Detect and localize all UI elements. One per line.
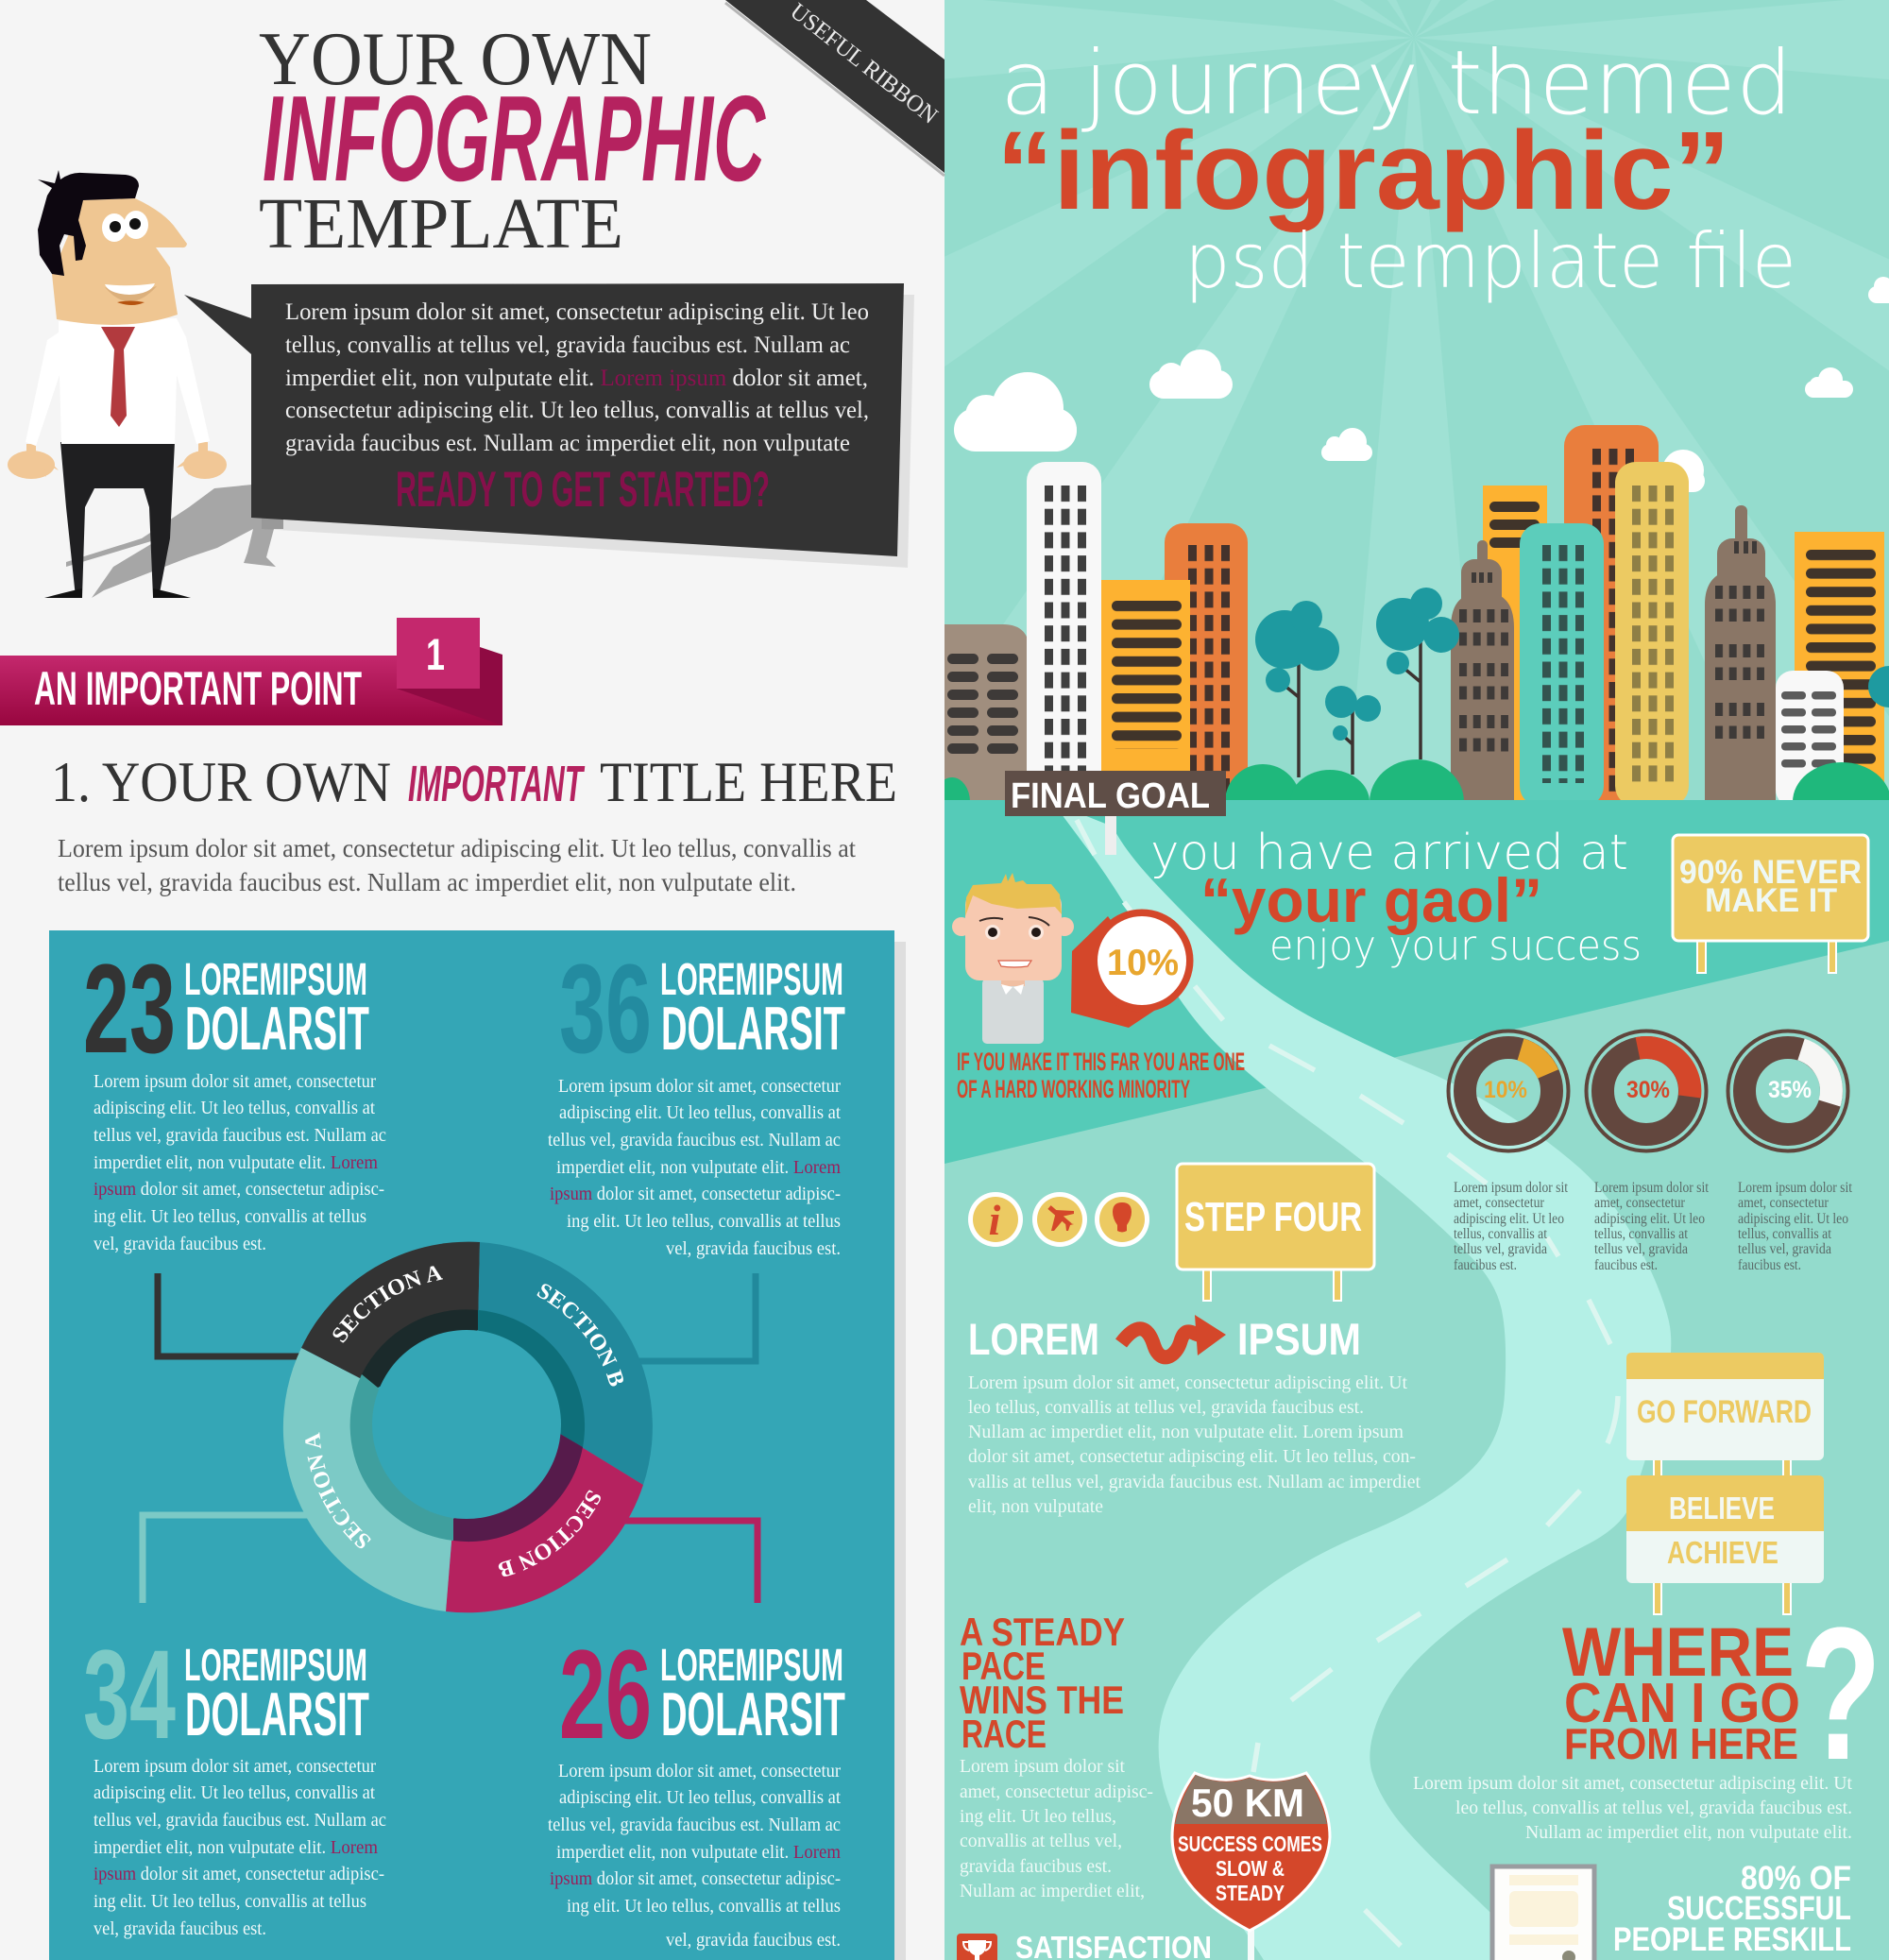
road bbox=[1053, 803, 1671, 1960]
bubble text: Lorem ipsum dolor sit amet, consectetur adipiscing elit. Ut leo bbox=[285, 299, 869, 325]
building: brown left bbox=[944, 624, 1030, 807]
bubble text: tellus, convallis at tellus vel, gravida faucibus est. Nullam ac bbox=[285, 332, 850, 358]
intro paragraph bbox=[58, 834, 856, 896]
shirt bbox=[26, 318, 210, 446]
small text columns under donuts: amet, consectetur bbox=[1594, 1195, 1686, 1211]
stat: 34 bbox=[83, 1625, 386, 1939]
banner: an important point: AN IMPORTANT POINT bbox=[34, 662, 362, 715]
small text columns under donuts: adipiscing elit. Ut leo bbox=[1454, 1211, 1564, 1227]
paragraph: tellus vel, gravida faucibus est. Nullam ac bbox=[548, 1815, 841, 1835]
paragraph: steady pace: ing elit. Ut leo tellus, bbox=[960, 1807, 1116, 1827]
building: yellow left bbox=[1101, 580, 1190, 807]
journey title: psd template file bbox=[1184, 217, 1796, 305]
corner ribbon bbox=[725, 0, 944, 176]
paragraph: tellus vel, gravida faucibus est. Nullam ac bbox=[548, 1131, 841, 1150]
banner: an important point: 1 bbox=[426, 629, 445, 679]
trees bbox=[1255, 588, 1889, 777]
paragraph: ipsum dolor sit amet, consectetur adipisc- bbox=[94, 1865, 384, 1884]
heading: a steady pace: WINS THE bbox=[960, 1678, 1124, 1722]
section title bbox=[51, 751, 897, 813]
paragraph: where: Lorem ipsum dolor sit amet, consectetur adipiscing elit. Ut bbox=[1413, 1774, 1853, 1794]
icon: info bbox=[968, 1192, 1023, 1247]
building: white small bbox=[1776, 671, 1844, 807]
paragraph: where: Nullam ac imperdiet elit, non vulputate elit. bbox=[1525, 1823, 1852, 1843]
building: white tower bbox=[1027, 462, 1101, 807]
hands bbox=[8, 442, 227, 479]
small text columns under donuts: tellus vel, gravida bbox=[1594, 1241, 1688, 1257]
bubble text: gravida faucibus est. Nullam ac imperdiet elit, non vulputate bbox=[285, 431, 850, 456]
badge: 10 percent pin: 10% bbox=[1107, 943, 1179, 983]
heading: where can I go from here: FROM HERE bbox=[1564, 1719, 1798, 1768]
paragraph: tellus vel, gravida faucibus est. Nullam ac bbox=[94, 1811, 386, 1831]
icon: trophy bbox=[957, 1934, 997, 1960]
donut: 35 percent: 35% bbox=[1768, 1077, 1812, 1103]
segment labels bbox=[305, 1266, 623, 1577]
heading: a steady pace: A STEADY bbox=[960, 1610, 1125, 1654]
stat: 26: 26 bbox=[559, 1625, 652, 1765]
callout: hard working minority bbox=[957, 1048, 1245, 1103]
sign: believe achieve bbox=[1626, 1475, 1824, 1614]
icon: info: i bbox=[989, 1196, 1001, 1244]
shield: 50 km bbox=[1172, 1773, 1330, 1960]
paragraph: tellus vel, gravida faucibus est. Nullam ac bbox=[94, 1126, 386, 1146]
journey title: “infographic” bbox=[996, 109, 1730, 233]
paragraph: lorem ipsum: vallis at tellus vel, gravida faucibus est. Nullam ac imperdiet bbox=[968, 1473, 1421, 1492]
paragraph: ing elit. Ut leo tellus, convallis at tellus bbox=[94, 1892, 366, 1912]
paragraph: ing elit. Ut leo tellus, convallis at tellus bbox=[567, 1897, 841, 1917]
segment labels: SECTION A bbox=[305, 1432, 371, 1549]
stat: 23 bbox=[83, 939, 386, 1254]
heading: where can I go from here: WHERE bbox=[1562, 1614, 1794, 1691]
building: teal bbox=[1520, 523, 1604, 807]
icon: bulb bbox=[1095, 1192, 1149, 1247]
banner: an important point bbox=[0, 618, 502, 725]
paragraph: where: leo tellus, convallis at tellus vel, gravida faucibus est. bbox=[1455, 1798, 1852, 1818]
bubble text bbox=[285, 299, 869, 456]
stat: 26 bbox=[548, 1625, 845, 1951]
bubble text: consectetur adipiscing elit. Ut leo tellus, convallis at tellus vel, bbox=[285, 398, 869, 423]
building: gray tower right bbox=[1705, 505, 1776, 807]
paragraph: steady pace: amet, consectetur adipisc- bbox=[960, 1782, 1153, 1802]
sign: believe achieve: ACHIEVE bbox=[1667, 1535, 1778, 1570]
heading: where can I go from here bbox=[1562, 1589, 1881, 1799]
mouth bbox=[105, 283, 157, 305]
paragraph: adipiscing elit. Ut leo tellus, convallis at bbox=[559, 1103, 842, 1123]
paragraph: imperdiet elit, non vulputate elit. Lorem bbox=[556, 1158, 841, 1178]
intro paragraph: tellus vel, gravida faucibus est. Nullam ac imperdiet elit, non vulputate elit. bbox=[58, 868, 796, 896]
callout: 80 percent reskill bbox=[1613, 1860, 1851, 1958]
heading: a steady pace bbox=[960, 1610, 1125, 1756]
heading: lorem arrow ipsum: LOREM bbox=[968, 1314, 1099, 1364]
stat: 34: DOLARSIT bbox=[185, 1679, 369, 1748]
heading: you have arrived: you have arrived at bbox=[1150, 825, 1628, 881]
sign: step four: STEP FOUR bbox=[1184, 1194, 1362, 1240]
paragraph: vel, gravida faucibus est. bbox=[666, 1931, 841, 1951]
small text columns under donuts: amet, consectetur bbox=[1454, 1195, 1545, 1211]
tie bbox=[101, 327, 135, 427]
heading: you have arrived: enjoy your success bbox=[1269, 922, 1642, 970]
title bbox=[259, 18, 766, 264]
final goal sign bbox=[1005, 771, 1226, 855]
paragraph: lorem ipsum bbox=[968, 1373, 1421, 1517]
paragraph: steady pace bbox=[960, 1757, 1153, 1901]
paragraph: adipiscing elit. Ut leo tellus, convallis at bbox=[94, 1099, 376, 1118]
building: yellow tall bbox=[1615, 462, 1689, 807]
callout: hard working minority: OF A HARD WORKING MINORITY bbox=[957, 1075, 1190, 1103]
segment labels: SECTION B bbox=[499, 1490, 601, 1577]
city skyline bbox=[934, 425, 1889, 844]
shield: 50 km: 50 KM bbox=[1191, 1781, 1304, 1825]
segment labels: SECTION A bbox=[332, 1266, 443, 1343]
paragraph: adipiscing elit. Ut leo tellus, convallis at bbox=[559, 1788, 842, 1808]
small text columns under donuts: tellus, convallis at bbox=[1738, 1226, 1832, 1242]
shield: 50 km: SUCCESS COMES bbox=[1178, 1832, 1322, 1856]
paragraph: Lorem ipsum dolor sit amet, consectetur bbox=[558, 1762, 841, 1781]
section title: 1. YOUR OWN bbox=[51, 751, 391, 813]
title: TEMPLATE bbox=[259, 184, 623, 264]
stat: 23: LOREMIPSUM bbox=[184, 955, 367, 1005]
head bbox=[52, 198, 187, 325]
building: orange right bbox=[1795, 532, 1884, 807]
sign: step four bbox=[1177, 1164, 1374, 1301]
stat: 26: DOLARSIT bbox=[661, 1679, 845, 1748]
donut: 35 percent bbox=[1728, 1031, 1847, 1150]
small text columns under donuts bbox=[1454, 1180, 1853, 1273]
stat: 23: 23 bbox=[83, 939, 176, 1080]
title: YOUR OWN bbox=[259, 18, 652, 101]
connector lines bbox=[143, 1273, 757, 1603]
shield: 50 km: STEADY bbox=[1216, 1881, 1285, 1905]
paragraph bbox=[94, 1072, 386, 1254]
journey title bbox=[996, 32, 1796, 305]
trousers bbox=[60, 442, 175, 598]
paragraph: steady pace: gravida faucibus est. bbox=[960, 1857, 1112, 1877]
small text columns under donuts: faucibus est. bbox=[1454, 1257, 1517, 1273]
paragraph: lorem ipsum: elit, non vulputate bbox=[968, 1497, 1103, 1517]
paragraph: lorem ipsum: Lorem ipsum dolor sit amet, consectetur adipiscing elit. Ut bbox=[968, 1373, 1408, 1393]
ground: lower area bbox=[944, 907, 1889, 1960]
sign: 90% never make it: 90% NEVER bbox=[1679, 854, 1862, 891]
clouds bbox=[954, 277, 1889, 492]
paragraph: where bbox=[1413, 1774, 1853, 1843]
stat: 34: 34 bbox=[83, 1625, 176, 1765]
paragraph: ing elit. Ut leo tellus, convallis at tellus bbox=[94, 1207, 366, 1227]
building: gray tower left bbox=[1451, 540, 1514, 807]
callout: 80 percent reskill: 80% OF bbox=[1741, 1860, 1851, 1897]
eyes bbox=[102, 211, 148, 242]
paragraph: Lorem ipsum dolor sit amet, consectetur bbox=[558, 1077, 841, 1097]
shoes bbox=[44, 588, 191, 598]
paragraph: steady pace: Nullam ac imperdiet elit, bbox=[960, 1882, 1145, 1901]
paragraph: imperdiet elit, non vulputate elit. Lorem bbox=[94, 1153, 378, 1173]
paragraph: steady pace: Lorem ipsum dolor sit bbox=[960, 1757, 1126, 1777]
small text columns under donuts: tellus, convallis at bbox=[1594, 1226, 1689, 1242]
call to action: READY TO GET STARTED? bbox=[396, 462, 770, 518]
small text columns under donuts: adipiscing elit. Ut leo bbox=[1594, 1211, 1705, 1227]
paragraph bbox=[94, 1757, 386, 1939]
heading: lorem arrow ipsum: IPSUM bbox=[1237, 1314, 1361, 1364]
small text columns under donuts: faucibus est. bbox=[1594, 1257, 1658, 1273]
building: yellow back bbox=[1483, 486, 1547, 807]
paragraph: lorem ipsum: Nullam ac imperdiet elit, non vulputate elit. Lorem ipsum bbox=[968, 1423, 1404, 1442]
paragraph: Lorem ipsum dolor sit amet, consectetur bbox=[94, 1757, 376, 1777]
stat: 36: LOREMIPSUM bbox=[660, 955, 843, 1005]
hair bbox=[38, 170, 139, 276]
donut: 30 percent: 30% bbox=[1626, 1077, 1670, 1103]
heading: a steady pace: PACE bbox=[962, 1644, 1046, 1688]
character shadow bbox=[66, 485, 283, 598]
heading: a steady pace: RACE bbox=[962, 1712, 1047, 1756]
paragraph bbox=[548, 1077, 842, 1259]
sign: go forward: GO FORWARD bbox=[1637, 1394, 1812, 1430]
donut: 10 percent: 10% bbox=[1484, 1077, 1527, 1103]
stat: 36: 36 bbox=[559, 939, 652, 1080]
paragraph: vel, gravida faucibus est. bbox=[666, 1239, 841, 1259]
paragraph: ipsum dolor sit amet, consectetur adipisc- bbox=[550, 1185, 841, 1204]
building: orange left bbox=[1165, 523, 1248, 807]
building: orange tall bbox=[1564, 425, 1659, 807]
paragraph bbox=[548, 1762, 842, 1951]
heading: you have arrived bbox=[1150, 825, 1642, 970]
section title: TITLE HERE bbox=[600, 751, 897, 813]
bushes bbox=[934, 759, 1889, 844]
paragraph: ipsum dolor sit amet, consectetur adipisc- bbox=[94, 1180, 384, 1200]
donut: 30 percent bbox=[1587, 1031, 1706, 1150]
final goal sign: FINAL GOAL bbox=[1011, 776, 1210, 816]
heading: where can I go from here: CAN I GO bbox=[1564, 1672, 1800, 1734]
small text columns under donuts: amet, consectetur bbox=[1738, 1195, 1829, 1211]
small text columns under donuts: tellus vel, gravida bbox=[1738, 1241, 1831, 1257]
small text columns under donuts: Lorem ipsum dolor sit bbox=[1594, 1180, 1710, 1196]
character: blond man bbox=[952, 873, 1074, 1044]
small text columns under donuts: Lorem ipsum dolor sit bbox=[1738, 1180, 1853, 1196]
donut: 10 percent bbox=[1449, 1031, 1568, 1150]
character: businessman bbox=[8, 170, 227, 598]
paragraph: lorem ipsum: dolor sit amet, consectetur adipiscing elit. Ut leo tellus, con- bbox=[968, 1447, 1416, 1467]
stat: 34: LOREMIPSUM bbox=[184, 1641, 367, 1691]
badge: 10 percent pin bbox=[1071, 909, 1194, 1028]
panel: teal sections bbox=[49, 930, 906, 1960]
sign: 90% never make it bbox=[1673, 835, 1868, 973]
paragraph: ing elit. Ut leo tellus, convallis at tellus bbox=[567, 1212, 841, 1232]
paragraph: Lorem ipsum dolor sit amet, consectetur bbox=[94, 1072, 376, 1092]
small text columns under donuts: tellus, convallis at bbox=[1454, 1226, 1548, 1242]
corner ribbon: USEFUL RIBBON bbox=[785, 0, 943, 129]
sign: go forward bbox=[1626, 1353, 1824, 1477]
paragraph: ipsum dolor sit amet, consectetur adipisc- bbox=[550, 1869, 841, 1889]
paragraph: imperdiet elit, non vulputate elit. Lorem bbox=[94, 1838, 378, 1858]
sign: believe achieve: BELIEVE bbox=[1669, 1491, 1775, 1525]
small text columns under donuts: adipiscing elit. Ut leo bbox=[1738, 1211, 1848, 1227]
stat: 36 bbox=[548, 939, 845, 1259]
paragraph: steady pace: convallis at tellus vel, bbox=[960, 1832, 1122, 1851]
section title: IMPORTANT bbox=[408, 756, 585, 812]
callout: 80 percent reskill: SUCCESSFUL bbox=[1667, 1890, 1851, 1927]
shield: 50 km: SLOW & bbox=[1216, 1856, 1285, 1881]
title: INFOGRAPHIC bbox=[263, 71, 766, 207]
small text columns under donuts: tellus vel, gravida bbox=[1454, 1241, 1547, 1257]
bubble text: imperdiet elit, non vulputate elit. Lorem ipsum dolor sit amet, bbox=[285, 366, 868, 391]
paragraph: adipiscing elit. Ut leo tellus, convallis at bbox=[94, 1783, 376, 1803]
paragraph: vel, gravida faucibus est. bbox=[94, 1235, 266, 1254]
paragraph: lorem ipsum: leo tellus, convallis at tellus vel, gravida faucibus est. bbox=[968, 1398, 1364, 1418]
paragraph: imperdiet elit, non vulputate elit. Lorem bbox=[556, 1843, 841, 1863]
paragraph: vel, gravida faucibus est. bbox=[94, 1919, 266, 1939]
segment labels: SECTION B bbox=[536, 1284, 623, 1387]
sign: 90% never make it: MAKE IT bbox=[1705, 882, 1837, 919]
callout: hard working minority: IF YOU MAKE IT THIS FAR YOU ARE ONE bbox=[957, 1048, 1245, 1076]
heading: you have arrived: “your gaol” bbox=[1200, 865, 1542, 935]
icon: squiggle arrow bbox=[1121, 1315, 1226, 1357]
panel: template infographic bbox=[0, 0, 945, 1960]
icon: door bbox=[1492, 1866, 1594, 1960]
small text columns under donuts: Lorem ipsum dolor sit bbox=[1454, 1180, 1569, 1196]
stat: 36: DOLARSIT bbox=[661, 994, 845, 1063]
donut chart: sections bbox=[283, 1241, 653, 1613]
intro paragraph: Lorem ipsum dolor sit amet, consectetur adipiscing elit. Ut leo tellus, convallis at bbox=[58, 834, 856, 862]
ground: green area bbox=[944, 800, 1889, 1164]
stat: 23: DOLARSIT bbox=[185, 994, 369, 1063]
stat: 26: LOREMIPSUM bbox=[660, 1641, 843, 1691]
icon: plane bbox=[1032, 1192, 1087, 1247]
journey title: a journey themed bbox=[1000, 32, 1793, 135]
speech bubble bbox=[184, 283, 914, 568]
heading: lorem arrow ipsum bbox=[968, 1314, 1361, 1364]
small text columns under donuts: faucibus est. bbox=[1738, 1257, 1801, 1273]
